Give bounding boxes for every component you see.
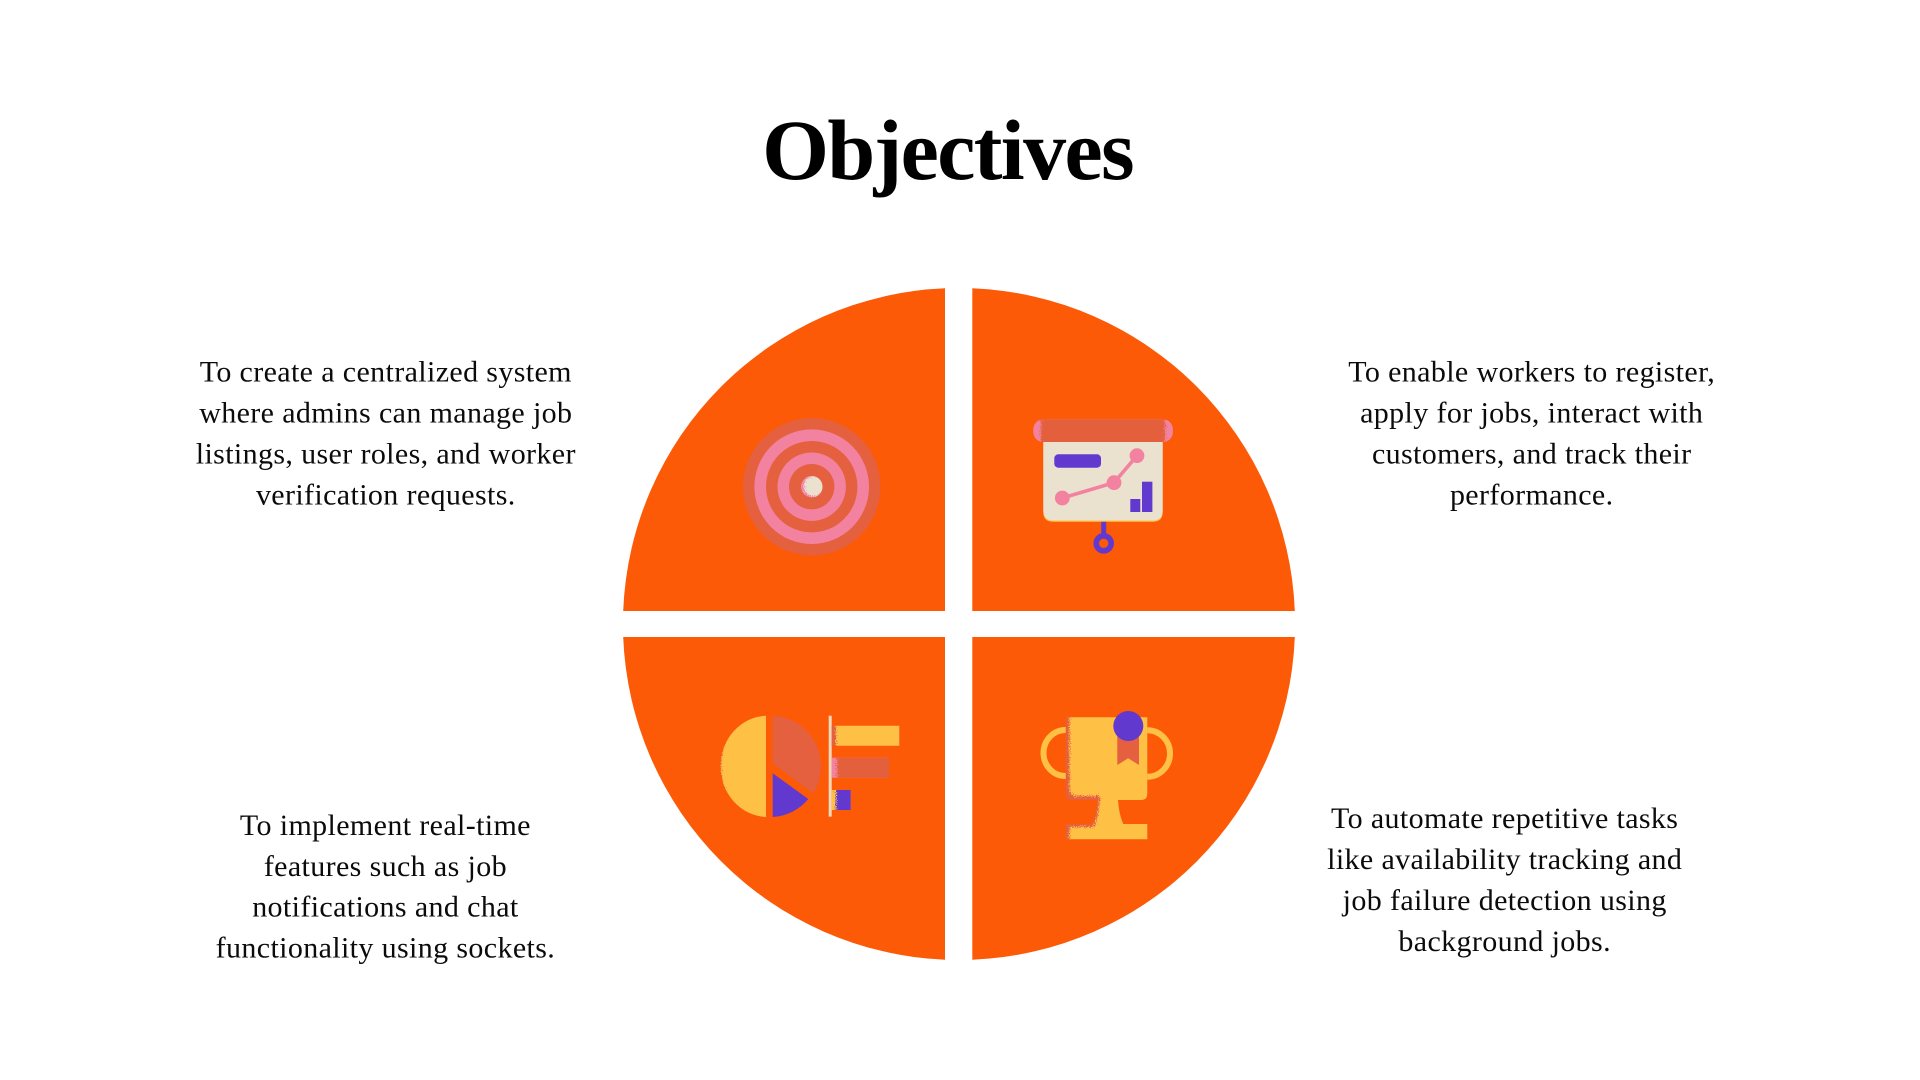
text block: top right objective: customers, and track their <box>1372 437 1691 470</box>
text block: top right objective: performance. <box>1450 478 1613 511</box>
icon: trophy <box>1044 705 1170 850</box>
text block: bottom right objective: job failure detection using <box>1342 884 1667 917</box>
panel: top left quadrant <box>623 288 945 611</box>
title: Objectives <box>762 102 1133 198</box>
text block: bottom right objective: To automate repetitive tasks <box>1331 802 1678 835</box>
text block: top left objective <box>196 355 576 511</box>
text block: top right objective <box>1348 355 1715 511</box>
panel: top right quadrant <box>972 288 1295 611</box>
panel: bottom right quadrant <box>972 637 1295 960</box>
text block: top left objective: verification requests. <box>256 478 516 511</box>
text block: top right objective: apply for jobs, interact with <box>1360 396 1703 429</box>
text block: bottom right objective: like availability tracking and <box>1327 843 1682 876</box>
text block: top left objective: listings, user roles, and worker <box>196 437 576 470</box>
text block: bottom left objective: functionality using sockets. <box>216 931 555 964</box>
text block: bottom left objective: notifications and chat <box>252 891 519 924</box>
text block: top right objective: To enable workers to register, <box>1348 355 1715 388</box>
quadrant circle <box>623 288 1295 960</box>
text block: bottom left objective: To implement real-time <box>240 809 531 842</box>
text block: top left objective: To create a centralized system <box>200 355 572 388</box>
icon: presentation board <box>1033 415 1173 551</box>
text block: bottom left objective: features such as job <box>264 850 507 883</box>
text block: bottom left objective <box>216 809 555 964</box>
icon: target <box>743 418 880 555</box>
text block: bottom right objective <box>1327 802 1682 958</box>
text block: bottom right objective: background jobs. <box>1398 925 1611 958</box>
panel: bottom left quadrant <box>623 637 945 960</box>
icon: pie and bar chart <box>720 716 900 817</box>
text block: top left objective: where admins can manage job <box>199 396 572 429</box>
